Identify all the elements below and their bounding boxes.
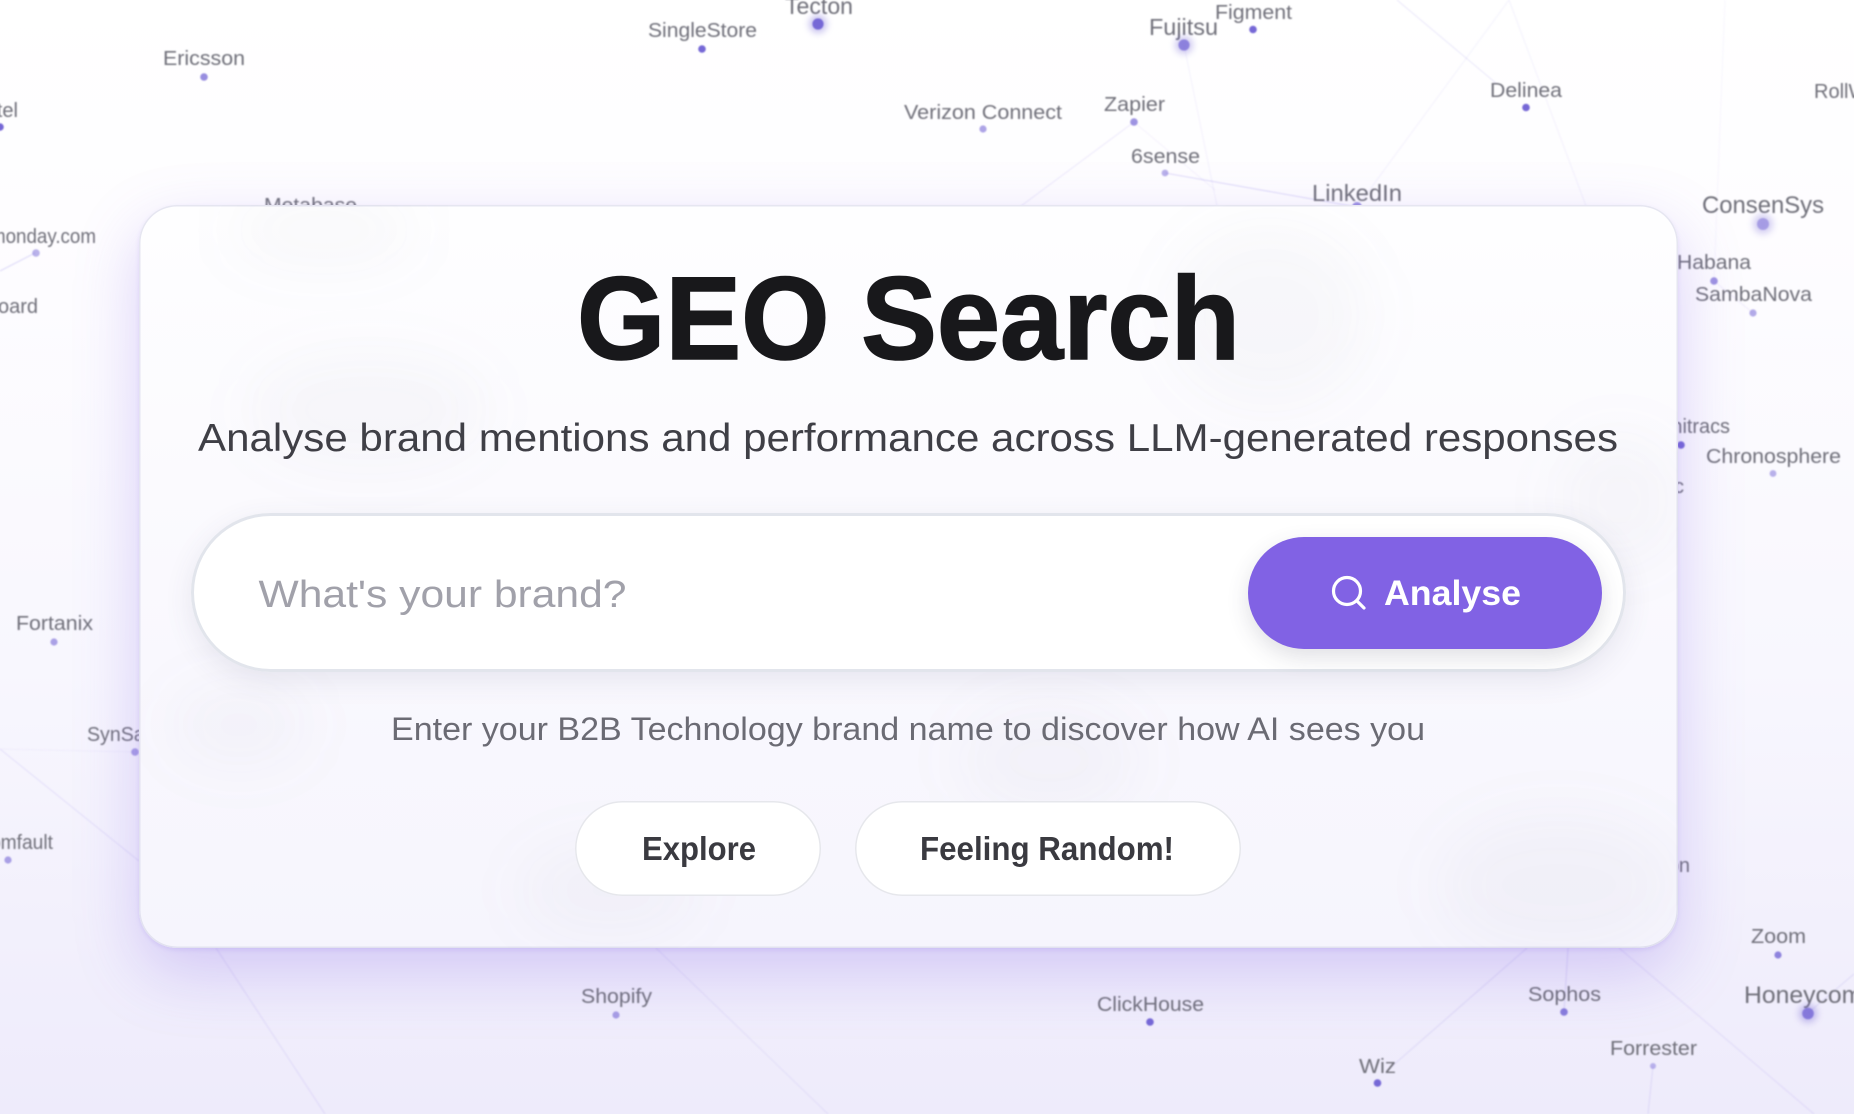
node: Comfault [0,832,53,864]
node: monday.com [0,226,96,257]
node: 6sense [1131,146,1200,176]
node: Zoom: Zoom [1751,926,1806,948]
icon: magnifying glass [1332,576,1366,610]
node: ClickHouse [1097,994,1204,1026]
node: SambaNova [1695,284,1813,317]
node: Fujitsu [1149,14,1218,54]
node: 6sense: 6sense [1131,146,1200,168]
node: ConsenSys: ConsenSys [1702,192,1824,219]
title: GEO Search [577,253,1240,385]
node: ConsenSys [1702,192,1824,234]
node: Ericsson [163,48,245,81]
node: Fortanix [16,613,93,646]
node: Chronosphere: Chronosphere [1706,446,1841,468]
button: Feeling Random!: Feeling Random! [920,830,1174,867]
node: ClickHouse: ClickHouse [1097,994,1204,1016]
node: Zapier [1104,94,1165,126]
node: hidden label ending in n: Anomalon [1600,855,1690,877]
node: SingleStore [648,20,757,53]
button: Feeling Random! [855,801,1241,896]
node: Habana [1677,252,1752,285]
node: Habana: Habana [1677,252,1752,274]
node: LinkedIn: LinkedIn [1312,180,1402,206]
node: Sophos: Sophos [1528,984,1601,1006]
node: Forrester [1610,1038,1697,1069]
panel: search card [139,205,1678,948]
node: Shopify [581,986,652,1019]
subtitle: Analyse brand mentions and performance across LLM-generated responses [198,417,1618,460]
node: Chronosphere [1706,446,1841,477]
button: Explore: Explore [642,830,756,867]
node: SynSaber [87,724,173,756]
button: Explore [575,801,821,896]
node: Delinea: Delinea [1490,80,1563,102]
node: Shopify: Shopify [581,986,652,1008]
node: Sophos [1528,984,1601,1016]
button: Analyse [1248,537,1602,649]
search box [190,513,1626,672]
search placeholder text: What's your brand? [258,574,626,616]
node: Wiz: Wiz [1359,1056,1396,1078]
node: Metabase: Metabase [264,195,357,217]
node: Verizon Connect [904,102,1062,133]
node: Delinea [1490,80,1563,111]
node: Verizon Connect: Verizon Connect [904,102,1062,124]
node: Fortanix: Fortanix [16,613,93,635]
node: SynSaber: SynSaber [87,724,173,746]
button label: Analyse: Analyse [1384,574,1521,613]
node: Zoom [1751,926,1806,959]
node: SingleStore: SingleStore [648,20,757,42]
node: Honeycomb [1744,982,1854,1022]
node: Figment [1215,2,1292,33]
node: SambaNova: SambaNova [1695,284,1813,306]
node: Tecton [785,0,853,33]
node: Unitracs [1657,416,1730,449]
node: Zapier: Zapier [1104,94,1165,116]
node: Fujitsu: Fujitsu [1149,14,1218,40]
node: Wiz [1359,1056,1396,1087]
node: Ericsson: Ericsson [163,48,245,70]
helper text: Enter your B2B Technology brand name to discover how AI sees you [391,711,1425,747]
node: Unitracs: Unitracs [1657,416,1730,438]
node: Figment: Figment [1215,2,1292,24]
node: Forrester: Forrester [1610,1038,1697,1060]
node: hidden label ending in c: Magic [1630,476,1684,498]
